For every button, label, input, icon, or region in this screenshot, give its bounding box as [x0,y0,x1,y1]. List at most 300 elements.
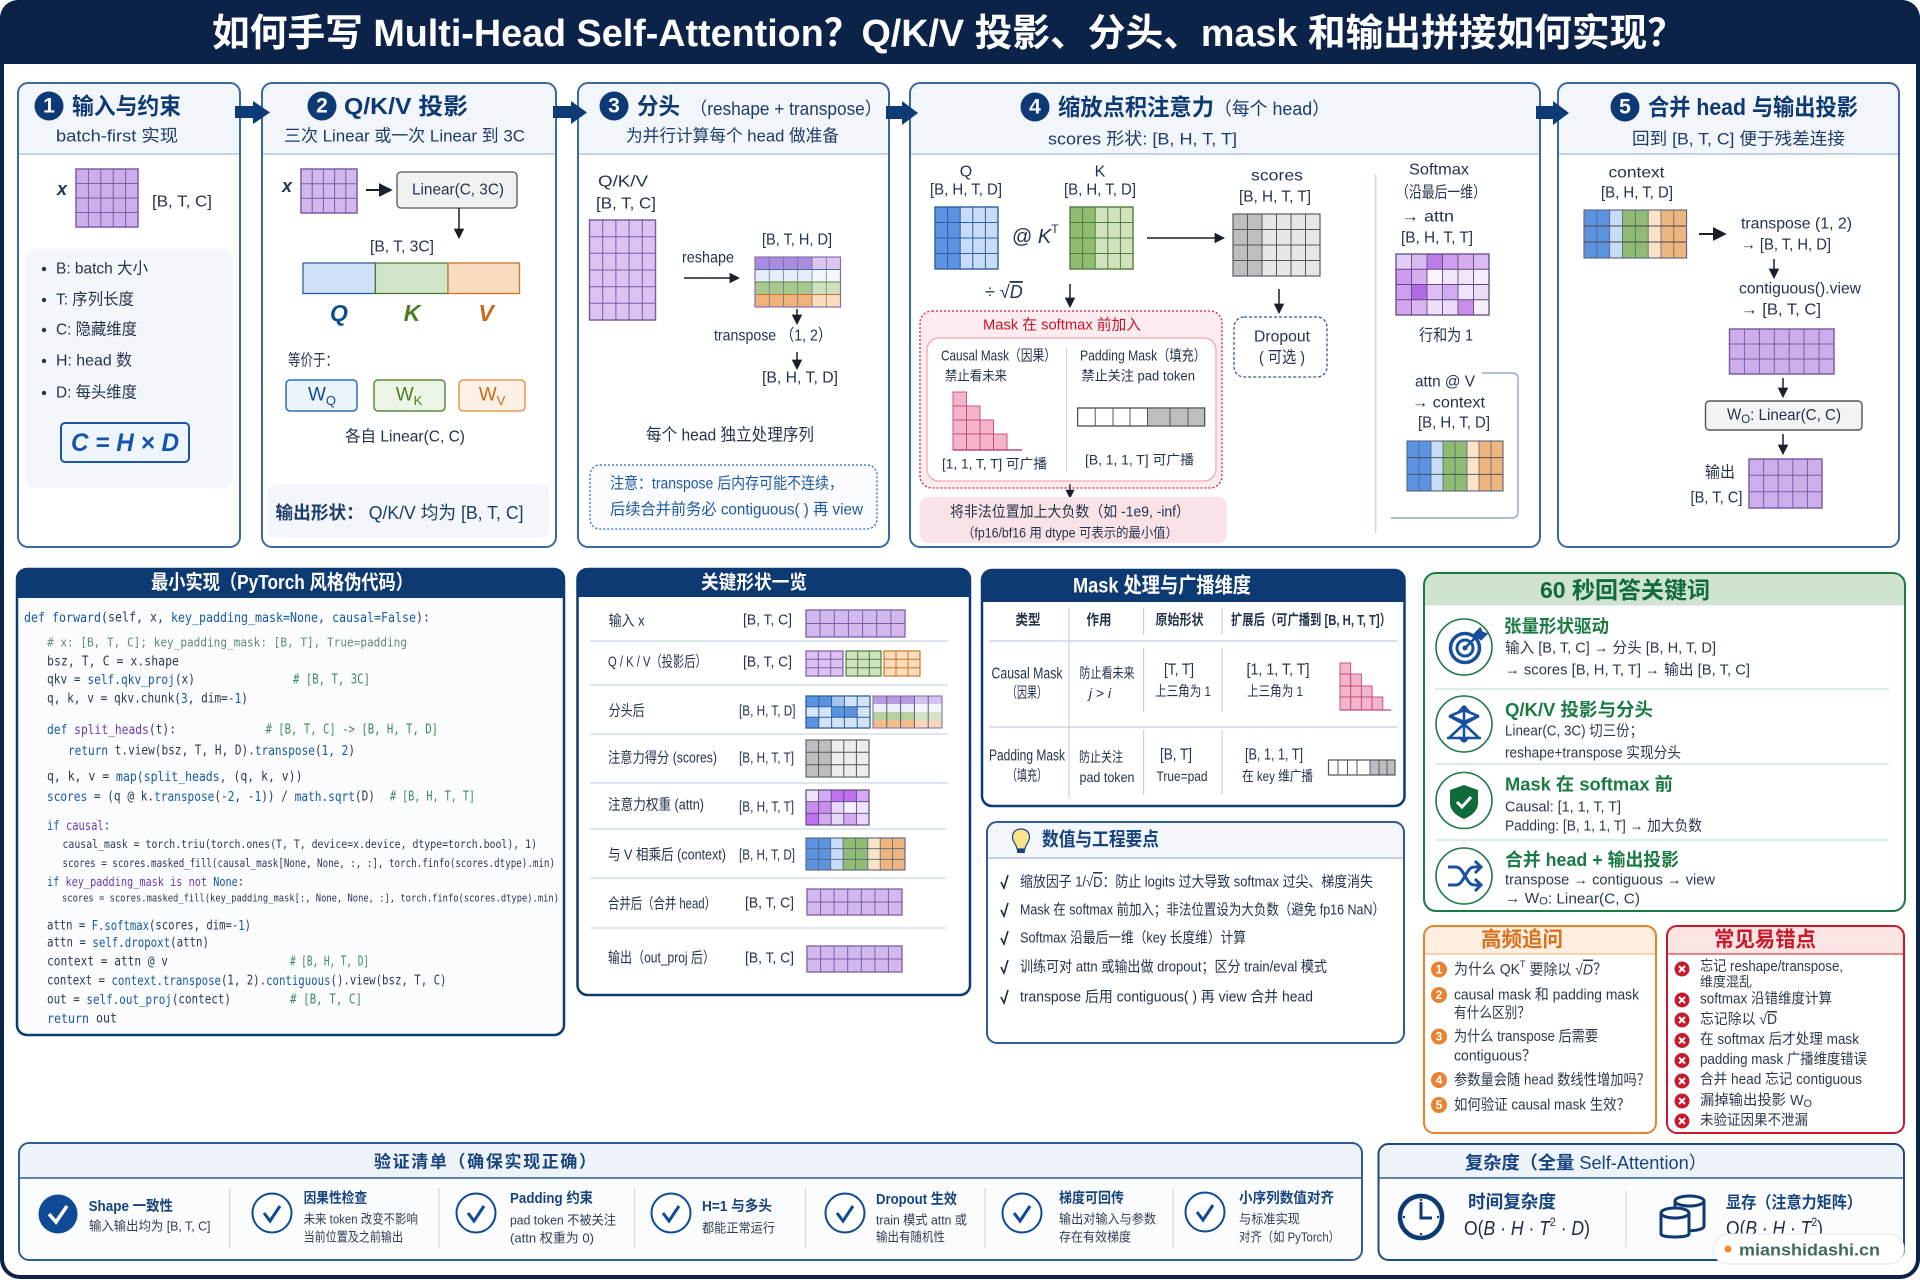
row: QKV projected: Q / K / V（投影后） [608,654,707,670]
causal row: （因果） [1007,684,1047,702]
row: split heads: [B, H, T, D] [739,702,796,720]
padding row: [B, 1, 1, T] [1245,746,1303,764]
attention weights grid [1396,254,1489,315]
row: input x [609,610,905,637]
padding row: True=pad [1156,768,1208,784]
arrow: step 4 to 5 [1536,101,1569,125]
divide by sqrt D: ÷ √D [985,282,1023,302]
check 6 gradient: 梯度可回传 [1059,1189,1124,1207]
panel: step 3 split heads [578,83,889,547]
keyword 4 text: O [1539,896,1548,908]
x label: x [56,179,68,199]
panel: step 5 merge heads [1558,83,1899,547]
memory complexity: O(B · H · T [1726,1218,1821,1240]
attn at V text: [B, H, T, D] [1418,414,1490,432]
keyword 4 text: transpose → contiguous → view [1505,872,1715,888]
arrow down [1773,259,1775,277]
heading: （每个 head） [1214,99,1330,119]
Q/K/V label: Q/K/V [598,174,648,190]
check 4 H=1 [652,1194,775,1236]
row: scores [608,740,869,777]
arrow down [796,352,798,368]
W_Q box: Q [326,392,336,408]
title banner [0,0,1920,64]
keyword 1 text: → scores [B, H, T, T] → 输出 [B, T, C] [1505,662,1750,678]
row: QKV projected [608,651,920,676]
causal row: 防止看未来 [1080,665,1134,681]
icon: shield [1436,772,1492,828]
Q/K/V label [596,174,656,212]
icon: cube arrows [1436,696,1492,752]
QKV tensor grid [590,220,656,320]
code listing: if causal: [47,818,110,834]
row: scores: [B, H, T, T] [739,750,794,766]
questions heading: 高频追问 [1481,928,1563,952]
softmax text: → attn [1401,208,1454,226]
attn at V text: attn @ V [1415,374,1475,390]
shapes heading: 关键形状一览 [701,572,807,594]
padding row: Padding Mask [989,748,1065,764]
arrow down to mask [1069,284,1071,306]
check 3 padding: pad token 不被关注 [510,1212,616,1228]
causal row [992,662,1391,710]
QKV labels: V [478,300,495,326]
contiguous text: → [B, T, C] [1741,302,1821,318]
mask panel [920,311,1222,488]
memory complexity: 显存（注意力矩阵） [1726,1192,1862,1212]
mistakes list: 未验证因果不泄漏 [1700,1112,1808,1129]
mistakes list: 忘记除以 √D [1700,1011,1777,1028]
keyword 3 text: Mask 在 softmax 前 [1505,775,1673,795]
subheading: 为并行计算每个 head 做准备 [626,126,839,146]
formula C = H x D: C = H × D [71,429,179,457]
padding row: （填充） [1007,768,1047,784]
transpose text: transpose (1, 2) [1741,216,1852,232]
question 2: causal mask 和 padding mask [1454,986,1639,1004]
step number 5: 5 [1619,96,1631,118]
mask table heading [982,570,1404,602]
code listing: attn = F.softmax(scores, dim=-1) [47,918,251,934]
question 3: 为什么 transpose 后需要 [1454,1028,1598,1045]
K label: K [1095,164,1106,180]
arrow down [796,309,798,323]
note: contiguous: 注意：transpose 后内存可能不连续， [610,474,843,492]
check 2 causality: 当前位置及之前输出 [304,1230,403,1244]
check 5 dropout: Dropout 生效 [876,1190,957,1208]
formula C = H x D [61,423,189,462]
time complexity: 时间复杂度 [1468,1192,1556,1212]
step number 3 [600,92,628,120]
panel: common mistakes [1667,926,1904,1133]
arrow down [1782,434,1784,453]
step number 3: 3 [608,94,620,118]
W_K box [374,380,445,411]
output grid [1749,459,1822,508]
icon: target [1436,619,1492,675]
softmax text: [B, H, T, T] [1401,230,1473,246]
output shape callout: 输出形状： Q/K/V 均为 [B, T, C] [276,502,524,523]
check 4 H=1: H=1 与多头 [702,1197,772,1215]
panel: code [17,569,564,1035]
W_O box: : Linear(C, C) [1750,406,1841,424]
code listing: # [B, T, 3C] [293,672,370,688]
mistakes list: padding mask 广播维度错误 [1700,1051,1867,1068]
causal staircase [953,392,1022,450]
keyword 2 text: reshape+transpose 实现分头 [1505,744,1681,762]
code listing [24,610,559,1026]
check 7 numerics: 与标准实现 [1239,1212,1300,1226]
x tensor grid [76,169,138,227]
keyword 3 text [1505,775,1702,834]
K grid [1070,207,1133,269]
W_V box [459,380,525,411]
softmax text: （沿最后一维） [1396,184,1486,202]
linear box [397,172,517,208]
code listing: context = attn @ v [47,954,168,970]
table header row: 类型 [1016,612,1040,629]
mask table heading: Mask 处理与广播维度 [1073,574,1251,598]
question 4: 参数量会随 head 数线性增加吗？ [1454,1072,1650,1088]
check 3 padding: (attn 权重为 0) [510,1230,594,1246]
check 6 gradient: 存在有效梯度 [1059,1230,1131,1244]
padding row [989,746,1395,785]
code listing: q, k, v = map(split_heads, (q, k, v)) [47,770,302,784]
attn at V text [1412,374,1490,432]
question 4: 4 [1436,1073,1443,1087]
row: merged [608,889,902,915]
row: attn: 注意力权重 (attn) [608,796,704,814]
causal row: 上三角为 1 [1247,683,1303,699]
W_K box: W [396,384,414,406]
time complexity [1464,1192,1590,1240]
subheading: batch-first 实现 [56,126,178,146]
time complexity: ) [1584,1218,1591,1240]
shapes heading [578,569,970,597]
step number 4 [1020,92,1050,122]
scores label [1239,168,1311,206]
dimension list: C: 隐藏维度 [56,320,137,338]
question 2: 2 [1436,988,1443,1002]
dimension list [26,249,233,488]
attn at V text: → context [1412,394,1486,412]
row: output: [B, T, C] [745,950,794,966]
keyword 2 text: Q/K/V 投影与分头 [1505,700,1653,720]
keyword 2 text: Linear(C, 3C) 切三份； [1505,722,1643,740]
memory complexity: ) [1817,1218,1823,1240]
dropout box [1234,317,1327,377]
keyword 3 text: Padding: [B, 1, 1, T] → 加大负数 [1505,818,1702,834]
bracket connector [1391,373,1518,518]
question 1: 要除以 √ [1526,961,1584,978]
Q/K/V label: [B, T, C] [596,196,656,212]
panel: key shapes [578,569,970,995]
context label [1601,164,1673,202]
question 1: T [1520,959,1526,970]
code heading [17,569,564,598]
panel: step 4 scaled dot product [910,83,1540,547]
dropout box: Dropout [1254,328,1311,346]
arrow down [1782,378,1784,396]
code listing: bsz, T, C = x.shape [47,654,179,670]
row: context [608,838,905,870]
causal row: 上三角为 1 [1155,683,1211,699]
mask heading: Mask 在 softmax 前加入 [983,316,1141,334]
row: context: [B, H, T, D] [739,846,795,864]
check 5 dropout: 输出有随机性 [876,1230,945,1244]
Q label [930,164,1002,198]
arrow to linear [366,189,390,191]
Q label: [B, H, T, D] [930,182,1002,198]
transpose text [1741,216,1852,254]
heading [637,93,882,119]
table header row [1016,611,1391,629]
mistakes list: O [1804,1098,1812,1110]
negative infinity note: 将非法位置加上大负数（如 -1e9, -inf） [950,504,1190,520]
x label: x [281,176,293,196]
matmul label: @ K [1012,226,1051,248]
step number 2: 2 [316,94,328,118]
memory complexity: 2 [1811,1215,1817,1229]
code listing: context = context.transpose(1, 2).contiguous().view(bsz, T, C) [47,974,446,988]
keyword 2 text [1505,700,1681,762]
arrow down to dropout [1278,289,1280,312]
causal row: [T, T] [1164,662,1194,678]
code listing: attn = self.dropoxt(attn) [47,936,209,950]
icon: memory stack [1661,1196,1704,1237]
heading: 缩放点积注意力 [1058,94,1214,120]
row: QKV projected: [B, T, C] [743,654,792,670]
watermark [1713,1234,1904,1264]
panel: numeric and engineering notes [987,822,1404,1043]
Q label: Q [960,164,972,180]
question 2 [1431,986,1639,1022]
QKV labels [330,300,495,326]
check 1 shape [38,1194,210,1234]
memory complexity [1726,1192,1862,1240]
W_Q box [286,380,357,411]
mistakes list: 漏掉输出投影 W [1700,1093,1805,1109]
check 2 causality: 因果性检查 [304,1189,367,1207]
panel: 60 second keywords [1424,573,1905,911]
question 1 [1431,959,1607,978]
row: split heads: 分头后 [609,702,645,720]
mask inner card [927,338,1216,481]
check 7 numerics [1186,1189,1340,1244]
padding row: 防止关注 [1079,749,1123,765]
code heading: 最小实现（PyTorch 风格伪代码） [151,570,413,594]
transpose label: transpose （1, 2） [714,326,832,344]
code listing: def forward(self, x, key_padding_mask=None, causal=False): [24,610,430,626]
check 2 causality: 未来 token 改变不影响 [304,1212,418,1226]
heading: Q/K/V 投影 [344,93,468,119]
keyword 3 text: Causal: [1, 1, T, T] [1505,798,1621,816]
panel: step 2 Q/K/V projection [262,83,556,547]
mistakes heading: 常见易错点 [1714,928,1816,952]
keyword 1 text: 张量形状驱动 [1504,617,1609,637]
question 1: D？ [1583,961,1608,978]
negative infinity note: （fp16/bf16 用 dtype 可表示的最小值） [962,526,1178,540]
linear box: Linear(C, 3C) [412,182,504,198]
arrow: step 2 to 3 [553,101,587,124]
W_Q box: W [308,384,326,406]
keyword 4 text: 合并 head + 输出投影 [1505,849,1679,870]
notes list: 训练可对 attn 或输出做 dropout；区分 train/eval 模式 [1020,958,1327,976]
icon: clock [1400,1196,1442,1238]
padding row: [B, T] [1160,746,1192,764]
causal row: j > i [1087,685,1112,701]
context grid [1407,441,1503,491]
code listing: if key_padding_mask is not None: [47,874,244,888]
per head caption: 每个 head 独立处理序列 [646,426,814,444]
dimension list: B: batch 大小 [56,260,148,278]
title banner: 如何手写 Multi-Head Self-Attention？Q/K/V 投影、分头、mask 和输出拼接如何实现？ [212,13,1685,55]
code listing: causal_mask = torch.triu(torch.ones(T, T, device=x.device, dtype=torch.bool), 1) [62,837,537,851]
note: contiguous: 后续合并前务必 contiguous( ) 再 view [610,500,863,518]
row: merged: [B, T, C] [745,894,794,912]
code listing: scores = scores.masked_fill(causal_mask[None, None, :, :], torch.finfo(scores.dtype).min) [62,856,555,870]
keyword 4 text [1505,849,1715,908]
question 1: 为什么 QK [1454,961,1525,978]
softmax column divider [1375,174,1377,533]
transpose text: → [B, T, H, D] [1741,236,1831,254]
W_K box: K [414,392,423,408]
time complexity: 2 [1550,1215,1556,1229]
check 7 numerics: 对齐（如 PyTorch） [1239,1230,1340,1244]
question 1: 1 [1436,962,1443,976]
notes list: transpose 后用 contiguous( ) 再 view 合并 head [1020,988,1313,1006]
merged grid [1730,329,1834,374]
complexity heading: 复杂度（全量 Self-Attention） [1465,1152,1707,1173]
W_V box: W [479,384,497,406]
QKV bar [303,263,520,294]
matmul label: T [1051,222,1059,236]
softmax text [1396,162,1486,246]
W_O box: W [1727,406,1742,424]
arrow: step 1 to 2 [235,101,270,124]
icon: shuffle [1436,848,1492,904]
icons: error marks [1674,962,1690,1128]
arrow down [458,208,460,237]
notes list: 缩放因子 1/√D：防止 logits 过大导致 softmax 过尖、梯度消失 [1020,874,1373,890]
time complexity: · D [1556,1218,1584,1240]
check 3 padding [456,1189,616,1246]
mistakes list: 忘记 reshape/transpose, [1700,958,1843,975]
dropout box: ( 可选 ) [1259,348,1305,366]
code listing: return out [47,1012,117,1026]
mask inner card: [B, 1, 1, T] 可广播 [1085,452,1195,468]
table header row: 扩展后（可广播到 [B, H, T, T]） [1231,611,1391,629]
x shape: [B, T, C] [152,194,212,210]
keywords heading: 60 秒回答关键词 [1540,577,1710,603]
panel: follow-up questions [1424,926,1656,1133]
icon: light bulb [1012,829,1030,853]
arrow down to pink note [1069,484,1071,497]
code listing: # [B, H, T, D] [290,954,369,970]
table header row: 原始形状 [1156,611,1204,629]
code listing: return t.view(bsz, T, H, D).transpose(1, 2) [68,744,355,758]
question 3: 3 [1436,1030,1443,1044]
output label: [B, T, C] [1690,490,1742,506]
mistakes list: softmax 沿错维度计算 [1700,990,1832,1008]
concat shape: [B, T, 3C] [370,238,434,256]
mistakes list: 合并 head 忘记 contiguous [1700,1071,1862,1088]
check 7 numerics: 小序列数值对齐 [1239,1189,1334,1207]
subheading: 回到 [B, T, C] 便于残差连接 [1632,130,1845,148]
question 3: contiguous？ [1454,1048,1536,1064]
negative infinity note [920,497,1227,543]
check 6 gradient: 输出对输入与参数 [1059,1212,1156,1226]
check 6 gradient [1002,1189,1156,1244]
context label: [B, H, T, D] [1601,184,1673,202]
keyword 4 text: → W [1505,890,1538,907]
question 5: 5 [1436,1098,1443,1112]
question 2: 有什么区别？ [1454,1004,1530,1022]
padding row: pad token [1080,769,1134,785]
step number 2 [308,92,336,120]
row: context: 与 V 相乘后 (context) [608,846,726,864]
arrow to scores [1147,237,1223,239]
QKV labels: Q [330,300,348,326]
row sum caption: 行和为 1 [1419,326,1473,344]
row: input x: 输入 x [609,612,645,630]
each linear caption: 各自 Linear(C, C) [345,428,465,446]
arrow right [1699,233,1724,235]
heading: 分头 [637,93,680,119]
code listing: q, k, v = qkv.chunk(3, dim=-1) [47,692,248,706]
check 4 H=1: 都能正常运行 [702,1220,775,1236]
mask inner card: 禁止看未来 [945,368,1007,384]
row: output: 输出（out_proj 后） [608,950,715,966]
code listing: qkv = self.qkv_proj(x) [47,672,195,688]
code listing: scores = (q @ k.transpose(-2, -1)) / math.sqrt(D) [47,790,375,804]
step number 5 [1610,92,1640,122]
code listing: # [B, T, C] -> [B, H, T, D] [266,722,438,738]
check 2 causality [252,1189,418,1244]
heading: 输入与约束 [72,93,181,119]
panel: mask table [982,570,1404,806]
K label [1064,164,1136,198]
time complexity: O(B · H · T [1464,1218,1559,1240]
contiguous text [1739,280,1861,318]
equivalent label: 等价于： [288,352,338,370]
question 5: 如何验证 causal mask 生效？ [1454,1096,1630,1114]
code listing: def split_heads(t): [47,722,176,738]
check 5 dropout [826,1190,967,1244]
mask inner card: Padding Mask（填充） [1080,348,1206,364]
row: output [608,946,902,972]
output label [1690,464,1742,506]
check 1 shape: Shape 一致性 [89,1198,173,1215]
causal row: Causal Mask [992,666,1063,682]
arrow: step 3 to 4 [886,101,918,125]
panel: verification checklist [19,1143,1362,1260]
subheading: 三次 Linear 或一次 Linear 到 3C [284,126,525,146]
row: attn [608,790,869,825]
mistakes list: 在 softmax 后才处理 mask [1700,1031,1860,1048]
row: input x: [B, T, C] [743,612,792,628]
output shape callout [268,484,549,538]
row: scores: 注意力得分 (scores) [608,748,717,766]
reshape arrow [684,277,738,279]
check 5 dropout: train 模式 attn 或 [876,1212,967,1228]
mask inner card: 禁止关注 pad token [1082,368,1195,384]
code listing: # x: [B, T, C]; key_padding_mask: [B, T], True=padding [47,634,407,650]
note: contiguous [590,465,877,529]
subheading: scores 形状: [B, H, T, T] [1048,130,1237,148]
keyword 4 text: : Linear(C, C) [1548,890,1640,907]
QKV labels: K [404,300,422,326]
scores label: scores [1251,168,1303,184]
